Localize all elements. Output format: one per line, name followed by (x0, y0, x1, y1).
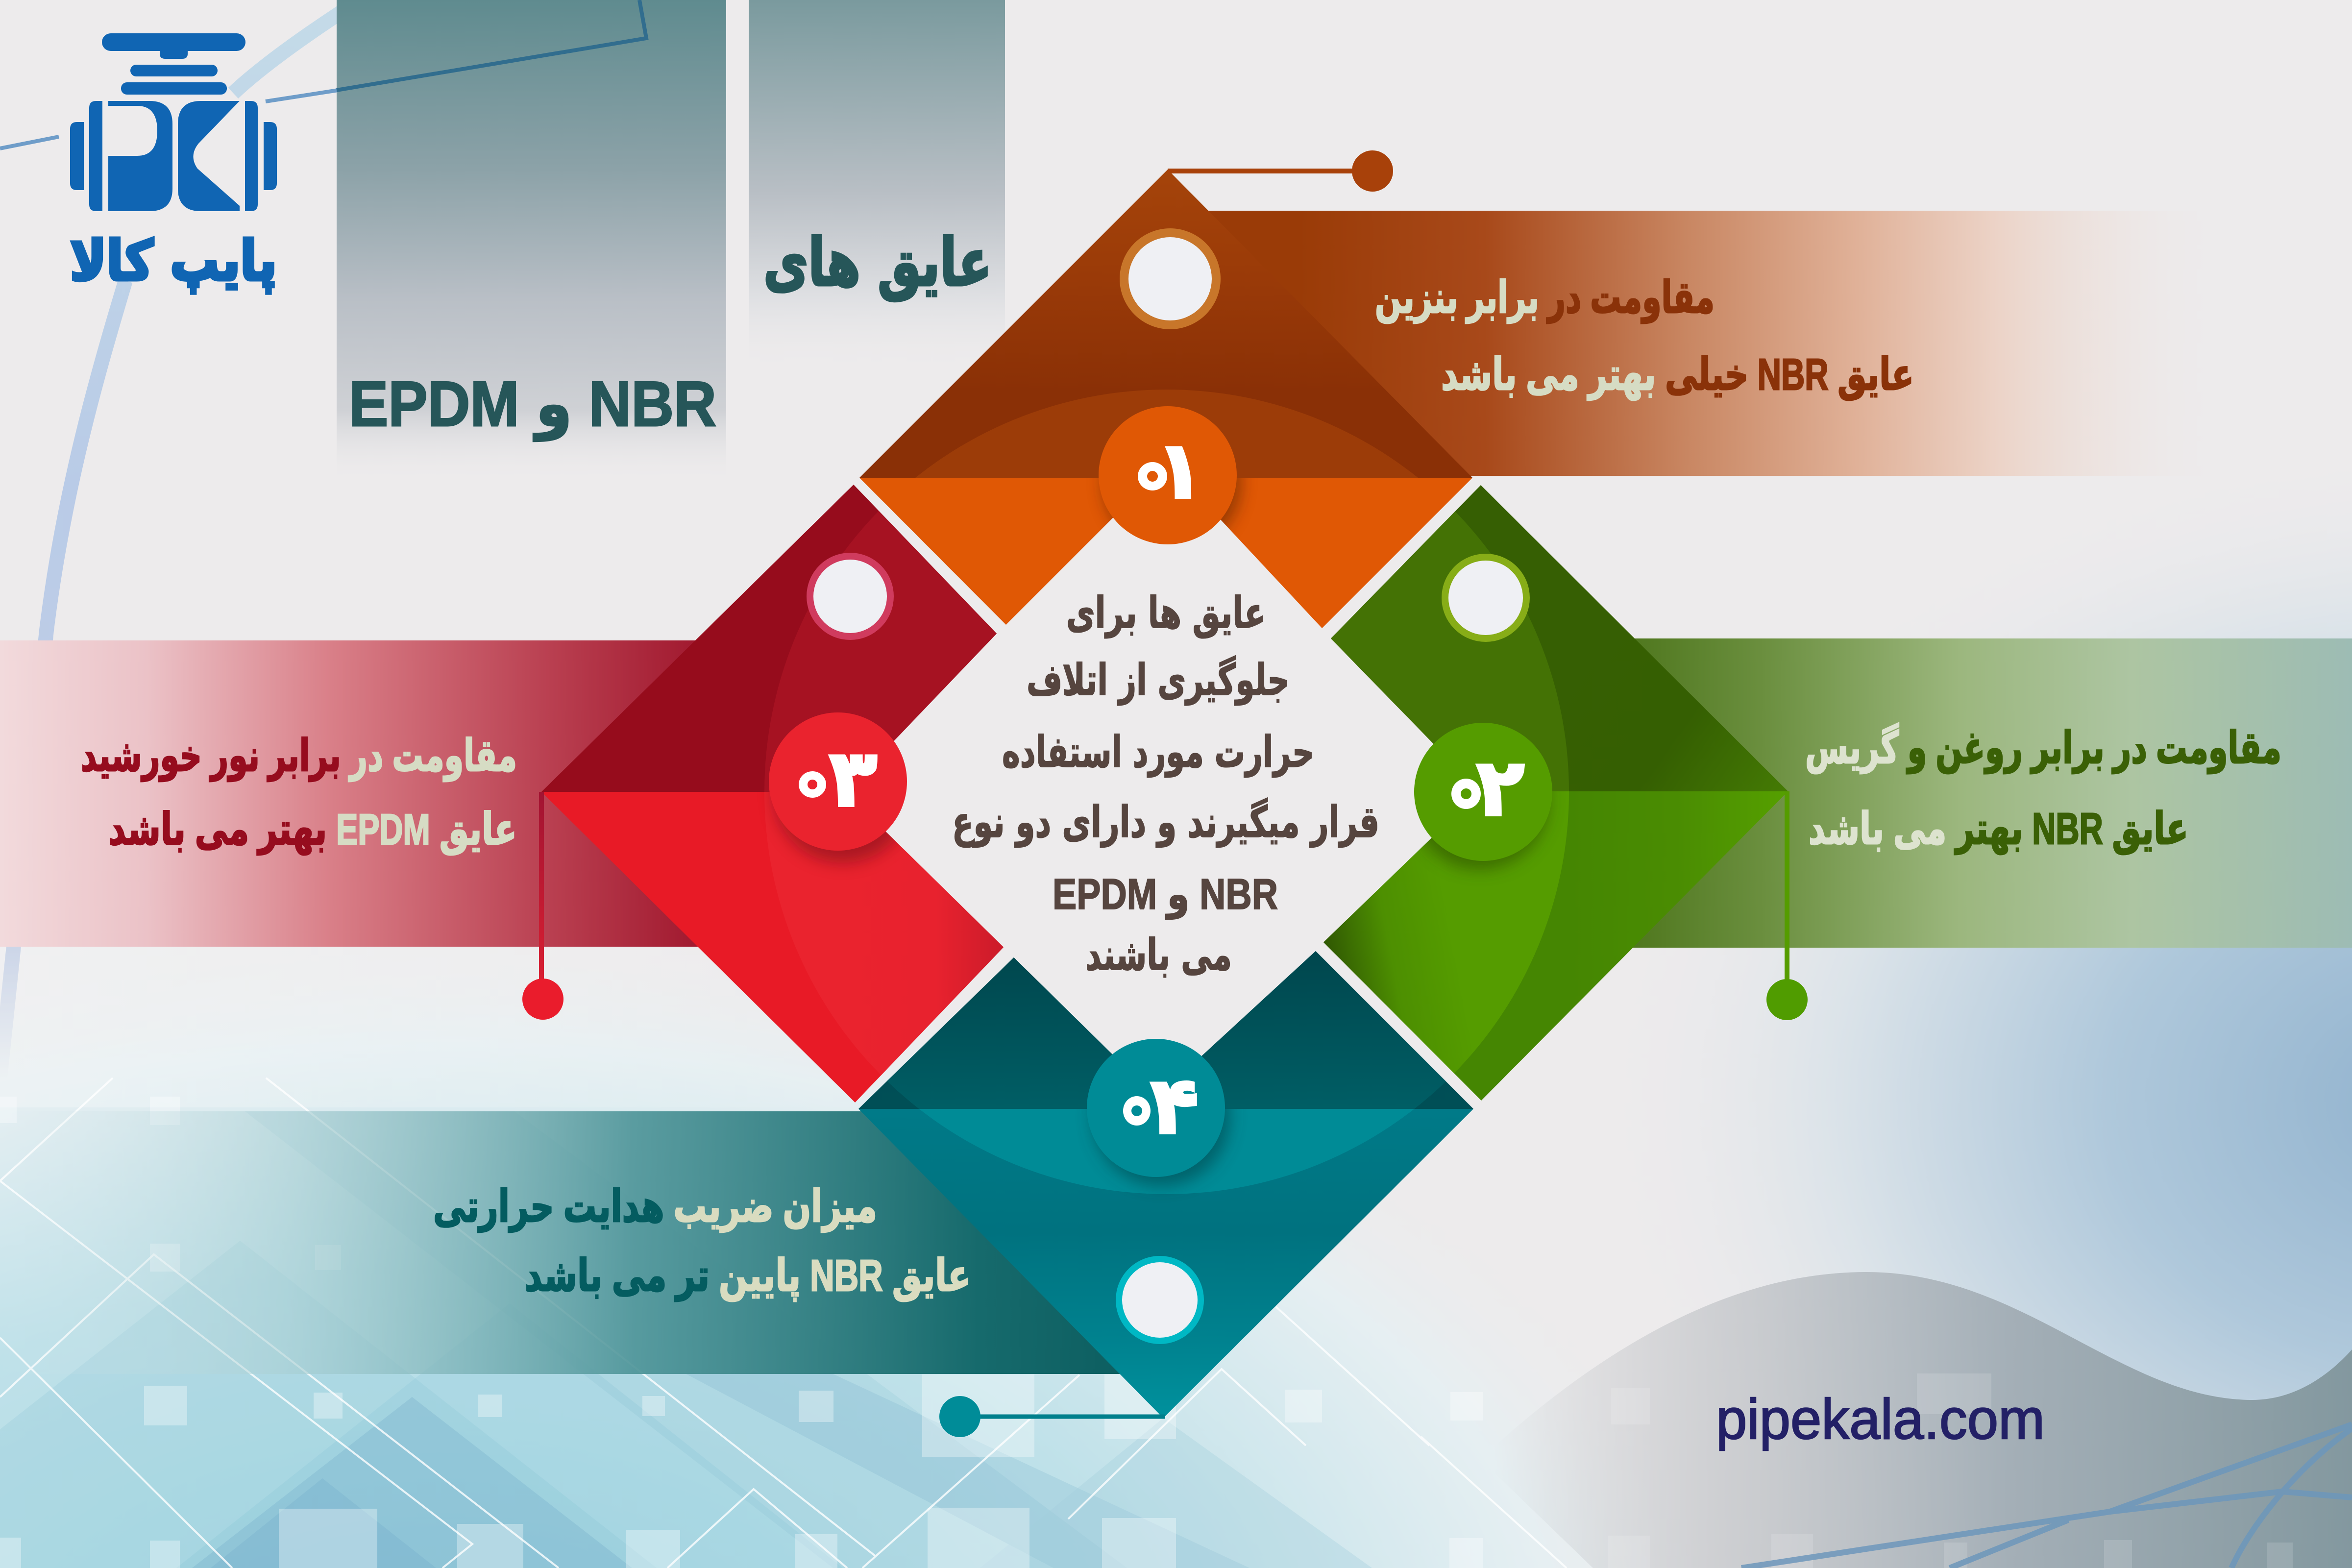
logo wordmark: پایپ کالا (70, 229, 277, 294)
text: orange item (1375, 273, 1914, 400)
panel: red segment 03 (522, 485, 1004, 1102)
central text (952, 588, 1379, 980)
connector line (980, 1414, 1165, 1419)
decorative wave (1480, 1272, 2352, 1568)
number badge 01 (1099, 406, 1237, 544)
central text: قرار میگیرند و دارای دو نوع (952, 797, 1379, 848)
text: green item (1805, 723, 2281, 855)
panel: teal segment 04 (858, 951, 1473, 1437)
central text: NBR و EPDM (1053, 870, 1278, 920)
text: red item: عایق EPDM بهتر می باشد (109, 805, 517, 855)
connector line (1785, 791, 1789, 982)
number badge 02 (1414, 723, 1552, 861)
connector line (1168, 169, 1360, 173)
text: red item (81, 732, 517, 855)
panel: green segment 02 (1323, 485, 1808, 1101)
decorative arc top left (0, 0, 368, 1078)
number badge 04: ۰ (1120, 1076, 1153, 1138)
connector dot (1352, 150, 1393, 192)
network lines bottom right (1741, 1424, 2352, 1568)
banner: green (1568, 638, 2352, 948)
number badge 02: ۲ (1476, 742, 1524, 833)
number badge 04: ۴ (1151, 1060, 1199, 1152)
ring marker (1120, 228, 1221, 329)
text: green item: عایق NBR بهتر می باشد (1809, 805, 2188, 855)
number badge 03: ۳ (829, 733, 877, 824)
number badge 04 (1087, 1039, 1225, 1177)
connector dot (1766, 979, 1808, 1020)
ring marker (1442, 554, 1530, 642)
text: teal item (433, 1182, 971, 1301)
banner: orange (1166, 211, 2230, 476)
number badge 01: ۰ (1136, 441, 1169, 503)
title panel: rectangle left column (337, 0, 726, 483)
number badge 03 (769, 712, 907, 851)
number badge 03: ۰ (796, 748, 829, 810)
panel: orange segment 01 (859, 150, 1472, 628)
connector dot (522, 979, 564, 1020)
decorative line top left (0, 0, 646, 148)
connector dot (939, 1396, 980, 1437)
banner: teal (0, 1111, 1152, 1374)
banner: red (0, 640, 735, 947)
text: teal item: میزان ضریب هدایت حرارتی (433, 1182, 877, 1232)
connector line (539, 792, 544, 982)
logo valve mark (70, 33, 277, 211)
text: orange item: عایق NBR خیلی بهتر می باشد (1441, 350, 1914, 400)
central text: می باشند (1085, 930, 1232, 980)
title panel: rectangle right column (749, 0, 1005, 372)
heading line 2: NBR و EPDM (349, 368, 716, 441)
website url: pipekala.com (1716, 1387, 2045, 1451)
text: red item: مقاومت در برابر نور خورشید (81, 732, 517, 782)
central text: حرارت مورد استفاده (1002, 727, 1314, 778)
heading line 1: عایق های (763, 224, 992, 301)
ring marker (807, 553, 894, 640)
logo (70, 33, 277, 294)
heading (349, 224, 992, 441)
text: orange item: مقاومت در برابر بنزین (1375, 273, 1715, 324)
faint squares on wave (1608, 1373, 2293, 1568)
ring marker (1116, 1256, 1204, 1344)
number badge 01: ۱ (1156, 424, 1204, 516)
central text: جلوگیری از اتلاف (1027, 655, 1290, 706)
number badge 02: ۰ (1449, 759, 1483, 822)
text: teal item: عایق NBR پایین تر می باشد (525, 1251, 971, 1301)
central text: عایق ها برای (1066, 588, 1266, 638)
